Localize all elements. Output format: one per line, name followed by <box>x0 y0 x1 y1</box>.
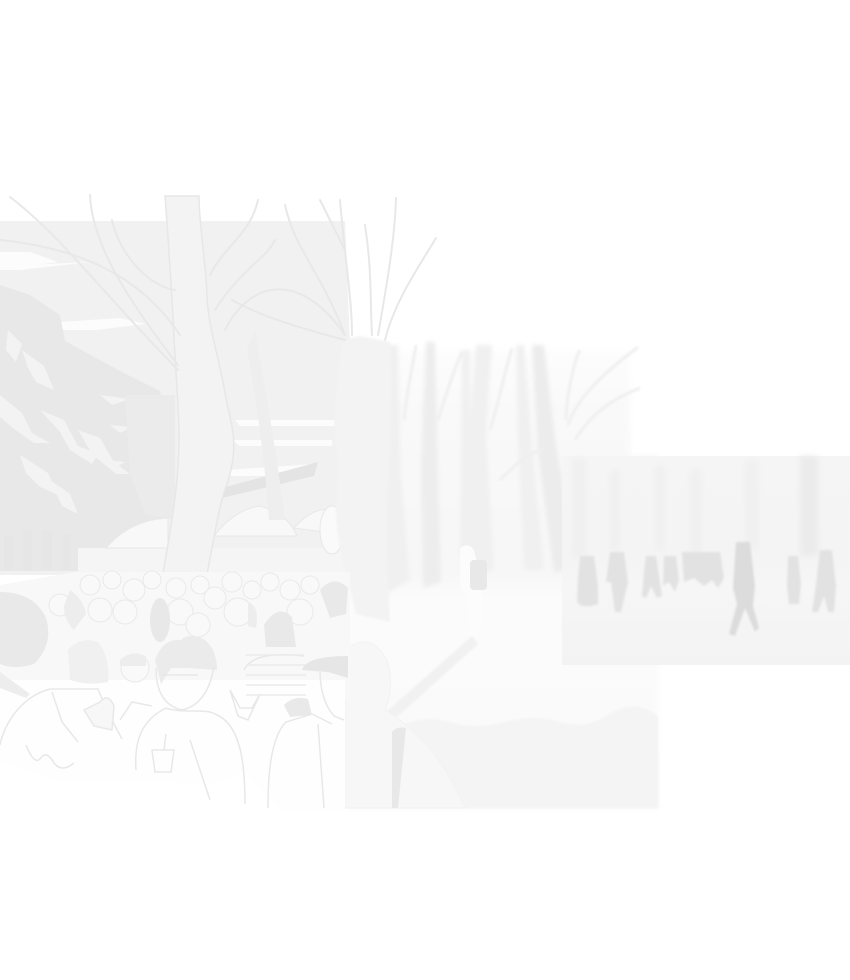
misty tree trunks <box>370 342 578 594</box>
walking figure with backpack <box>460 545 487 638</box>
distant tree clump <box>125 395 175 520</box>
background trees <box>572 456 818 558</box>
striped shirt <box>246 655 306 695</box>
foliage highlights <box>0 330 151 514</box>
panel: middle misty avenue <box>345 342 658 808</box>
long figure shadow <box>386 636 478 718</box>
stall umbrellas <box>106 506 340 548</box>
panel: left park scene <box>0 195 436 810</box>
middle background trunk <box>247 330 285 520</box>
foreground crowd area <box>0 680 345 810</box>
right tree trunk <box>335 336 392 622</box>
hedge foreground <box>395 706 658 808</box>
balloon <box>320 506 344 554</box>
white clouds <box>0 252 335 476</box>
hooded figure <box>345 642 465 808</box>
misty branches <box>404 345 640 480</box>
main tree trunk <box>163 196 234 574</box>
background crowd heads <box>49 571 319 682</box>
stall building <box>78 548 348 576</box>
bare branches <box>0 195 436 370</box>
crowd base <box>0 572 350 700</box>
dark hair shapes <box>0 581 348 717</box>
crowd outlines <box>0 655 344 808</box>
walking silhouettes <box>577 542 836 636</box>
dark foliage <box>0 285 172 571</box>
pavilion roof <box>222 462 318 498</box>
panel: right crowd on path <box>562 456 850 665</box>
sky band <box>0 221 350 575</box>
tree row at bottom left <box>4 530 70 570</box>
